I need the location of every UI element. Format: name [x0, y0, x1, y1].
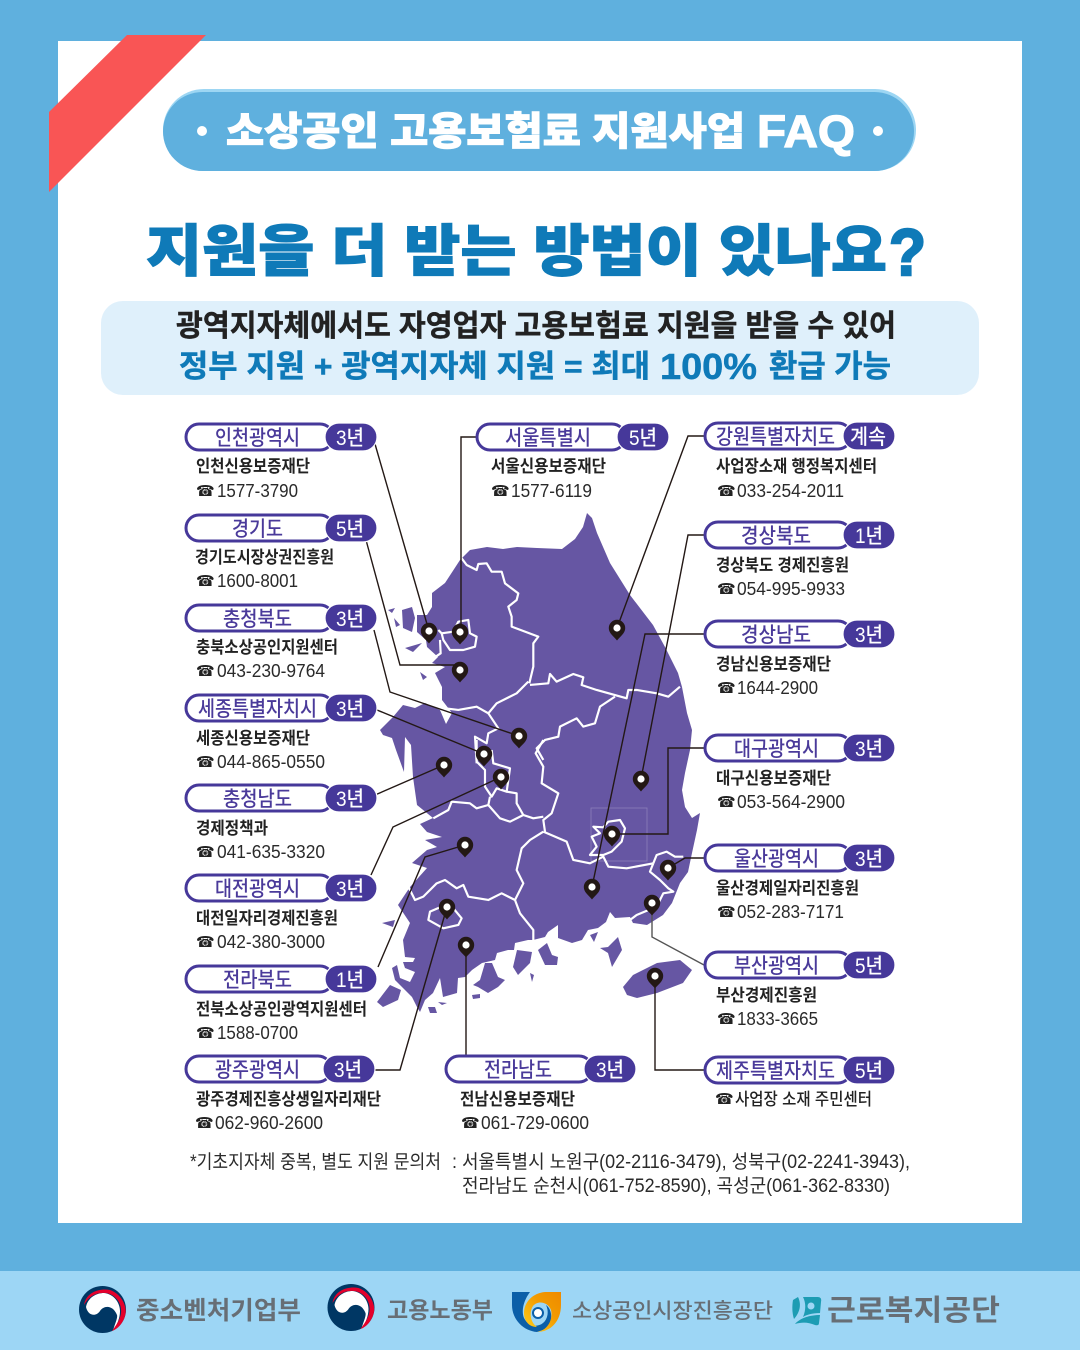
label: 전라북도: 1588-0700	[217, 1023, 298, 1043]
callout box	[101, 301, 979, 395]
text: 중소벤처기업부: 중소벤처기업부	[136, 1297, 301, 1325]
label: 경기도: ☎	[196, 572, 215, 590]
label: 전라남도: 전남신용보증재단	[460, 1090, 575, 1109]
label: 세종특별자치시	[186, 694, 377, 772]
text: 소상공인시장진흥공단: 소상공인시장진흥공단	[572, 1300, 773, 1323]
internal borders, upper	[433, 558, 680, 763]
label: 부산광역시: 부산경제진흥원	[716, 986, 817, 1005]
label: 경기도: 5년	[336, 518, 364, 541]
main heading: ?	[889, 215, 926, 289]
label: 세종특별자치시: 세종신용보증재단	[196, 729, 310, 748]
label: 전라남도	[446, 1055, 636, 1133]
label: 제주특별자치도: 사업장 소재 주민센터	[735, 1090, 872, 1109]
label: 충청남도: 경제정책과	[196, 819, 268, 838]
label: 충청북도: ☎	[196, 662, 215, 680]
label: 대전광역시: 대전일자리경제진흥원	[196, 909, 338, 928]
callout box: 100%	[660, 346, 757, 387]
label: 충청북도	[186, 604, 377, 681]
panel: white card	[58, 41, 1022, 1223]
label: 대구광역시: 대구광역시	[734, 738, 819, 761]
label: 강원특별자치도: 사업장소재 행정복지센터	[716, 457, 877, 476]
callout box: 환급 가능	[769, 349, 891, 384]
label: 대구광역시: 3년	[855, 738, 883, 761]
label: 인천광역시: 인천신용보증재단	[196, 457, 310, 476]
footnote: *기초지자체 중복, 별도 지원 문의처	[190, 1151, 441, 1173]
label: 울산광역시: 울산광역시	[734, 848, 819, 871]
label: 경상남도: 경남신용보증재단	[716, 655, 831, 674]
label: 충청남도: 3년	[336, 788, 364, 811]
label: 경상남도: 3년	[855, 624, 883, 647]
label: 경상북도: ☎	[717, 580, 736, 598]
label: 대전광역시: ☎	[196, 933, 215, 951]
icon: 근로복지공단 logo	[792, 1297, 821, 1325]
label: 광주광역시: ☎	[195, 1114, 214, 1132]
label: 제주특별자치도	[705, 1056, 895, 1109]
label: 전라남도: ☎	[461, 1114, 480, 1132]
label: 세종특별자치시: 세종특별자치시	[198, 698, 317, 721]
label: 경기도	[186, 514, 377, 591]
label: 충청남도: 041-635-3320	[217, 842, 325, 862]
label: 경상남도: 1644-2900	[737, 678, 818, 698]
label: 전라북도: 전라북도	[223, 969, 292, 992]
label: 경기도: 경기도	[232, 518, 283, 541]
label: 인천광역시	[186, 423, 377, 501]
label: 부산광역시	[705, 951, 895, 1029]
leader lines	[366, 436, 704, 1070]
label: 충청남도: ☎	[196, 843, 215, 861]
label: 충청남도	[186, 784, 377, 862]
label: 강원특별자치도: 강원특별자치도	[716, 426, 835, 449]
label: 전라남도: 061-729-0600	[481, 1113, 589, 1133]
icon: government emblem 2	[328, 1284, 374, 1331]
label: 부산광역시: 5년	[855, 955, 883, 978]
label: 제주특별자치도: ☎	[715, 1090, 734, 1108]
label: 대구광역시: 대구신용보증재단	[716, 769, 831, 788]
label: 세종특별자치시: 3년	[336, 698, 364, 721]
label: 제주특별자치도: 5년	[855, 1060, 883, 1083]
corner ribbon	[49, 35, 206, 192]
label: 강원특별자치도: 계속	[850, 426, 886, 449]
label: 서울특별시	[477, 423, 669, 501]
label: 인천광역시: 3년	[336, 427, 364, 450]
icon: government emblem 1	[79, 1286, 126, 1333]
label: 광주광역시: 광주경제진흥상생일자리재단	[196, 1090, 381, 1109]
label: 대전광역시	[186, 874, 377, 952]
label: 서울특별시: ☎	[491, 482, 510, 500]
label: 대전광역시: 042-380-3000	[217, 932, 325, 952]
label: 대전광역시: 3년	[336, 878, 364, 901]
footnote: : 서울특별시 노원구(02-2116-3479), 성북구(02-2241-3943),	[452, 1151, 910, 1173]
icon: 소상공인시장진흥공단 logo	[512, 1292, 561, 1332]
label: 강원특별자치도: 033-254-2011	[737, 481, 844, 501]
label: 경상북도	[705, 521, 895, 599]
label: 경상북도: 1년	[855, 525, 883, 548]
label: 전라북도: 1년	[336, 969, 364, 992]
label: 경상북도: 경상북도	[741, 525, 811, 548]
internal borders, lower	[408, 740, 683, 940]
label: 강원특별자치도: ☎	[717, 482, 736, 500]
label: 전라북도: 전북소상공인광역지원센터	[196, 1000, 367, 1019]
label: 전라북도: ☎	[196, 1024, 215, 1042]
label: 인천광역시: ☎	[196, 482, 215, 500]
label: 울산광역시	[705, 844, 895, 922]
label: 광주광역시: 062-960-2600	[215, 1113, 323, 1133]
label: 전라남도: 전라남도	[484, 1059, 552, 1082]
label: 울산광역시: 052-283-7171	[737, 902, 844, 922]
label: 대구광역시	[705, 734, 895, 812]
label: 울산광역시: ☎	[717, 903, 736, 921]
label: 대구광역시: 053-564-2900	[737, 792, 845, 812]
label: 경상북도: 경상북도 경제진흥원	[716, 556, 849, 575]
label: 서울특별시: 서울특별시	[505, 427, 591, 450]
label: 서울특별시: 서울신용보증재단	[491, 457, 606, 476]
label: 충청북도: 충청북도	[223, 608, 292, 631]
title pill: 소상공인 고용보험료 지원사업	[226, 111, 745, 154]
label: 울산광역시: 3년	[855, 848, 883, 871]
label: 광주광역시: 광주광역시	[215, 1059, 300, 1082]
callout box: 광역지자체에서도 자영업자 고용보험료 지원을 받을 수 있어	[176, 310, 896, 343]
label: 전라남도: 3년	[596, 1059, 624, 1082]
label: 경기도: 경기도시장상권진흥원	[195, 548, 334, 567]
label: 강원특별자치도	[705, 422, 895, 501]
text: 근로복지공단: 근로복지공단	[827, 1294, 1000, 1327]
label: 대구광역시: ☎	[717, 793, 736, 811]
label: 충청북도: 3년	[336, 608, 364, 631]
title pill: FAQ	[757, 106, 855, 157]
label: 서울특별시: 5년	[629, 427, 657, 450]
text: 고용노동부: 고용노동부	[387, 1297, 493, 1323]
label: 경상북도: 054-995-9933	[737, 579, 845, 599]
label: 경상남도: ☎	[717, 679, 736, 697]
label: 대전광역시: 대전광역시	[215, 878, 300, 901]
map pins	[421, 620, 676, 988]
label: 광주광역시: 3년	[334, 1059, 362, 1082]
footer band	[0, 1271, 1080, 1350]
label: 인천광역시: 1577-3790	[217, 481, 298, 501]
label: 전라북도	[186, 965, 377, 1043]
label: 인천광역시: 인천광역시	[215, 427, 300, 450]
label: 서울특별시: 1577-6119	[511, 481, 592, 501]
title pill	[163, 89, 916, 171]
label: 충청남도: 충청남도	[223, 788, 292, 811]
callout box: 정부 지원 + 광역지자체 지원 = 최대	[179, 349, 650, 384]
label: 경기도: 1600-8001	[217, 571, 298, 591]
footnote	[190, 1151, 910, 1197]
label: 충청북도: 충북소상공인지원센터	[196, 638, 338, 657]
label: 부산광역시: ☎	[717, 1010, 736, 1028]
label: 제주특별자치도: 제주특별자치도	[716, 1060, 835, 1083]
label: 울산광역시: 울산경제일자리진흥원	[716, 879, 859, 898]
label: 경상남도	[705, 620, 895, 698]
main heading: 지원을 더 받는 방법이 있나요	[146, 220, 887, 283]
label: 충청북도: 043-230-9764	[217, 661, 325, 681]
label: 광주광역시	[186, 1055, 381, 1133]
footnote: 전라남도 순천시(061-752-8590), 곡성군(061-362-8330)	[462, 1175, 890, 1197]
label: 경상남도: 경상남도	[741, 624, 811, 647]
label: 부산광역시: 부산광역시	[734, 955, 819, 978]
label: 세종특별자치시: ☎	[196, 753, 215, 771]
map of South Korea	[377, 513, 700, 1013]
label: 세종특별자치시: 044-865-0550	[217, 752, 325, 772]
label: 부산광역시: 1833-3665	[737, 1009, 818, 1029]
